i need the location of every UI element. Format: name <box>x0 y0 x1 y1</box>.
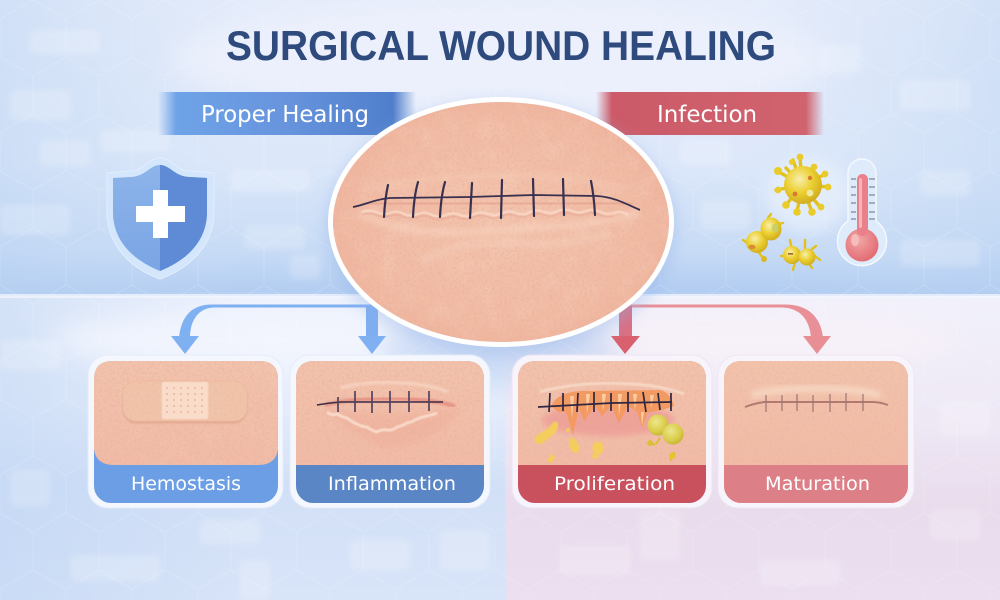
card photo: matured scar <box>724 361 908 465</box>
banner: Infection: Infection <box>657 102 757 128</box>
icon: shield with medical cross <box>107 158 214 279</box>
card photo: inflamed sutured wound <box>296 361 484 465</box>
sutures on central wound <box>384 179 595 218</box>
arrows: infection to proliferation and maturation <box>611 304 831 354</box>
card: Maturation <box>718 355 914 508</box>
icon: small bacteria cluster <box>781 240 820 270</box>
card: Maturation: Maturation <box>765 473 870 495</box>
title: SURGICAL WOUND HEALING <box>226 22 776 69</box>
card photo: bandage on skin <box>94 361 278 465</box>
central wound photo <box>325 97 677 356</box>
card: Inflammation <box>290 355 490 508</box>
card photo: infected wound with pus and bacteria <box>518 361 706 465</box>
icon: thermometer <box>837 159 886 266</box>
card: Inflammation: Inflammation <box>328 473 456 495</box>
yellow pus droplets <box>535 422 604 463</box>
icon: large virus <box>766 154 850 233</box>
card: Hemostasis <box>88 355 283 508</box>
banner: Proper Healing <box>158 92 416 135</box>
pus teeth along wound <box>551 390 674 435</box>
icon: bacteria pair <box>743 214 783 262</box>
banner: Proper Healing: Proper Healing <box>201 102 369 128</box>
card: Proliferation: Proliferation <box>554 473 675 495</box>
yellow bacteria on wound <box>647 414 684 460</box>
banner: Infection <box>596 92 824 135</box>
card: Hemostasis: Hemostasis <box>131 473 241 495</box>
card: Proliferation <box>512 355 712 508</box>
arrows: proper healing to hemostasis and inflammation <box>171 304 386 354</box>
